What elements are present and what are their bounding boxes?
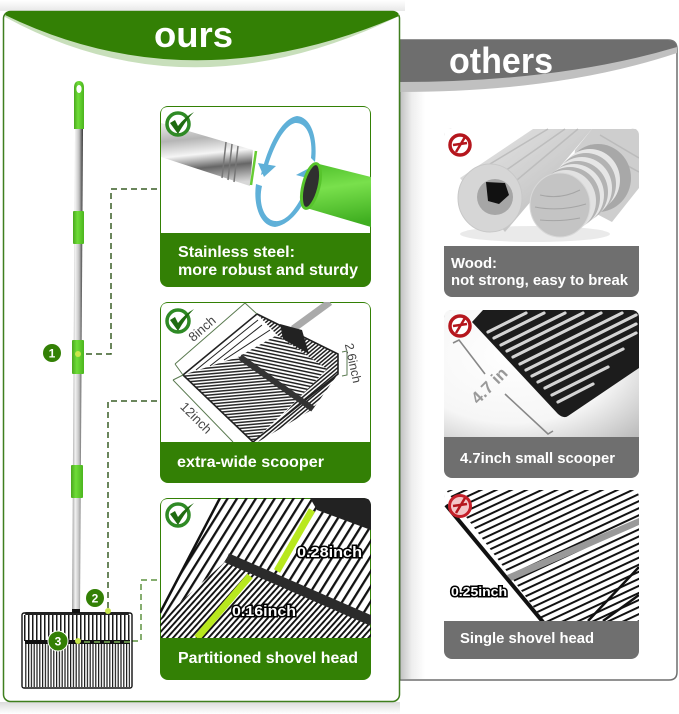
photo: scooper with dimensions <box>173 302 364 442</box>
marker 2 <box>86 589 104 607</box>
wood photo <box>444 128 639 246</box>
card: extra-wide scooper <box>160 302 371 483</box>
photo: scooper with dimensions: 8inch <box>185 313 219 344</box>
card: stainless steel: more robust and sturdy <box>178 262 358 279</box>
photo: partitioned grid: 0.28inch <box>297 544 362 561</box>
marker 1: 1 <box>49 346 56 360</box>
photo: partitioned grid <box>160 498 372 638</box>
caption: Single shovel head <box>460 630 594 647</box>
card: single shovel head <box>444 490 639 659</box>
shovel head front view <box>22 609 132 688</box>
heading: others: others <box>449 40 553 81</box>
card: partitioned shovel head <box>160 498 372 680</box>
card: wood handle: not strong, easy to break <box>451 272 629 289</box>
icon: check <box>167 503 194 526</box>
caption: Stainless steel: <box>178 244 295 261</box>
icon: check <box>167 112 194 135</box>
photo: scooper with dimensions: 2.6inch <box>342 342 364 384</box>
caption: extra-wide scooper <box>177 454 324 471</box>
marker 3: 3 <box>55 634 62 648</box>
photo: steel threaded tube and green socket <box>161 116 371 227</box>
icon: check <box>167 309 194 332</box>
caption: 4.7inch small scooper <box>460 450 615 467</box>
heading: ours: ours <box>154 14 233 55</box>
pole grips <box>71 81 84 498</box>
marker 1 <box>43 344 61 362</box>
others header band <box>400 40 677 92</box>
marker 3 <box>48 631 68 651</box>
photo: partitioned grid: 0.16inch <box>232 603 296 620</box>
marker 2: 2 <box>92 592 99 606</box>
telescopic pole <box>71 81 84 612</box>
icon: red cross <box>450 316 470 336</box>
caption: Wood: <box>451 255 497 272</box>
photo: scooper with dimensions: 12inch <box>177 399 215 437</box>
connector lines <box>84 189 157 641</box>
icon: red cross <box>450 135 470 155</box>
single shovel photo: 0.25inch <box>451 584 507 599</box>
small scooper photo: 4.7 in <box>467 364 512 408</box>
ours header band <box>5 11 399 67</box>
panel: ours <box>4 11 400 702</box>
single shovel photo <box>444 490 639 622</box>
card: small scooper <box>444 310 639 478</box>
icon: red cross <box>450 496 470 516</box>
panel: others <box>400 40 677 680</box>
caption: Partitioned shovel head <box>178 650 358 667</box>
card: wood handle <box>444 128 639 297</box>
small scooper photo <box>444 310 639 437</box>
yellow anchor dots <box>75 351 111 644</box>
card: stainless steel <box>160 106 371 287</box>
